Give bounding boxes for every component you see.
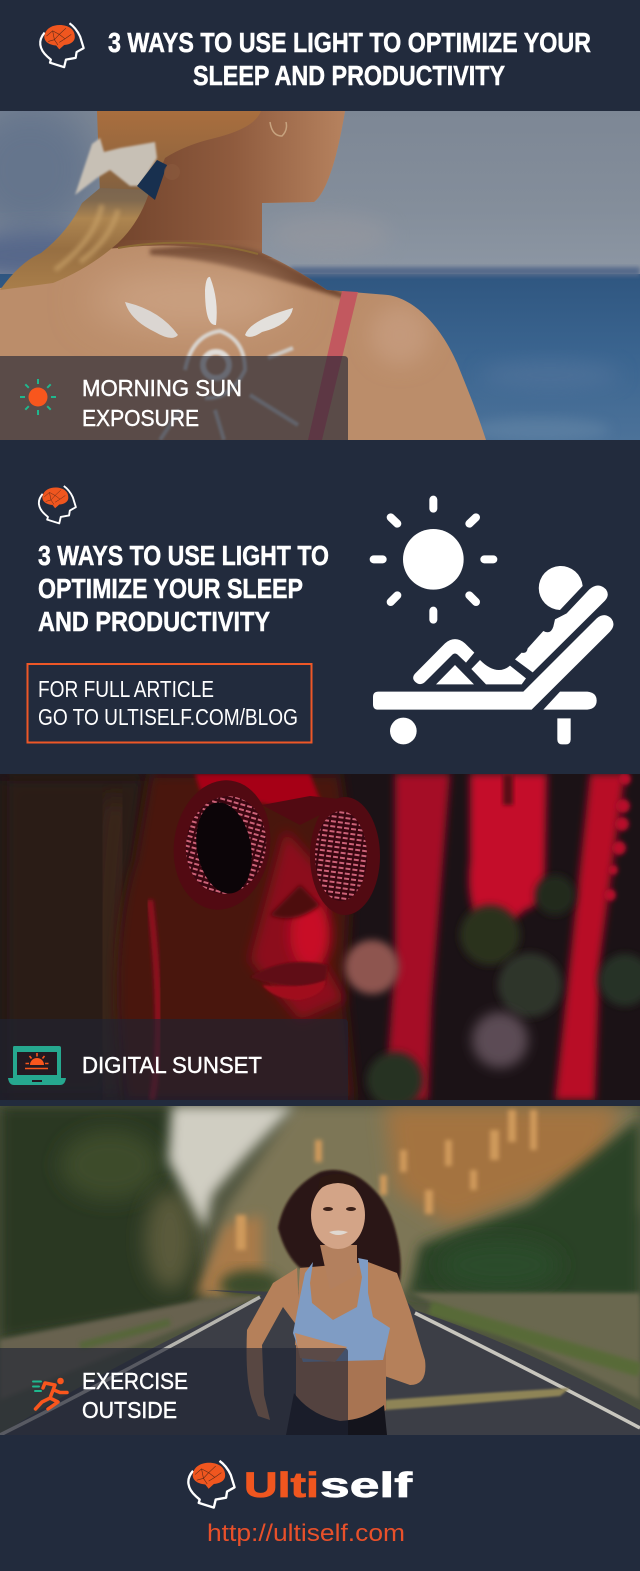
heading: 3 WAYS TO USE LIGHT TO — [38, 540, 329, 571]
caption: exercise outside: OUTSIDE — [82, 1397, 177, 1423]
caption: morning sun exposure: EXPOSURE — [82, 405, 199, 431]
icon: head logo — [40, 23, 84, 67]
icon: person sunbathing on lounger — [373, 500, 613, 744]
callout: full article: FOR FULL ARTICLE — [38, 676, 214, 702]
footer — [188, 1461, 413, 1547]
title — [108, 27, 591, 91]
panel: exercise photo — [0, 1106, 640, 1435]
heading: AND PRODUCTIVITY — [38, 606, 270, 637]
caption panel: morning sun — [0, 356, 348, 440]
icon: runner — [33, 1378, 67, 1409]
caption: morning sun exposure: MORNING SUN — [82, 375, 242, 401]
caption panel: digital sunset — [0, 1019, 348, 1100]
icon: head logo — [39, 486, 76, 523]
title: SLEEP AND PRODUCTIVITY — [193, 60, 505, 91]
caption panel: exercise outside — [0, 1348, 348, 1435]
wordmark: Ulti — [244, 1466, 319, 1505]
callout: full article: GO TO ULTISELF.COM/BLOG — [38, 704, 298, 730]
header band — [40, 23, 591, 91]
caption: morning sun exposure — [82, 375, 242, 431]
caption: exercise outside: EXERCISE — [82, 1368, 188, 1394]
callout: full article — [28, 664, 312, 742]
icon: head logo — [188, 1461, 235, 1508]
icon: sun — [20, 379, 56, 415]
runner woman — [247, 1170, 425, 1435]
caption: exercise outside — [82, 1368, 188, 1423]
icon: laptop with sunset — [8, 1046, 66, 1085]
wordmark: self — [320, 1466, 413, 1505]
panel: digital sunset photo — [0, 773, 640, 1108]
woman's back — [0, 111, 500, 440]
footer url: http://ultiself.com — [207, 1520, 405, 1547]
panel: morning sun photo — [0, 100, 640, 442]
heading — [38, 540, 329, 637]
heading: OPTIMIZE YOUR SLEEP — [38, 573, 303, 604]
caption: digital sunset: DIGITAL SUNSET — [82, 1052, 262, 1078]
panel: article promo — [28, 486, 613, 744]
wordmark — [244, 1466, 413, 1505]
